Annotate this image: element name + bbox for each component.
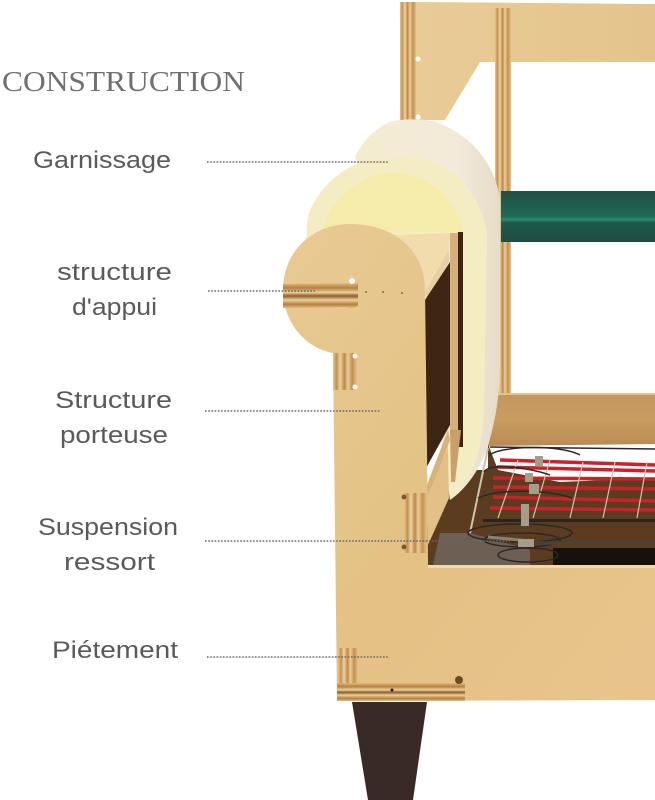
label: structure d'appui: structure (57, 259, 172, 286)
label: Suspension ressort: ressort (64, 549, 155, 576)
label: Suspension ressort (38, 514, 510, 576)
inner wood strip and dark gap (425, 232, 463, 545)
label: Structure porteuse: Structure (55, 387, 172, 414)
foam: outer cushion (355, 119, 500, 500)
foot rail (337, 676, 465, 701)
inner back panel (485, 393, 655, 446)
title: CONSTRUCTION (2, 66, 245, 98)
small tenon (333, 353, 358, 390)
leg (352, 702, 427, 800)
label: Structure porteuse (55, 387, 380, 449)
label: structure d'appui: d'appui (72, 294, 157, 321)
foam: middle layer (306, 157, 487, 500)
label: Piétement: Piétement (52, 637, 178, 664)
label: Garnissage: Garnissage (33, 147, 171, 174)
webbing strap (501, 191, 655, 242)
label: structure d'appui (57, 259, 315, 321)
label: Structure porteuse: porteuse (60, 422, 168, 449)
leg tenon (338, 648, 358, 684)
suspension tenon (402, 493, 427, 553)
label: Suspension ressort: Suspension (38, 514, 178, 541)
back frame (400, 2, 655, 396)
dark cavity (425, 262, 450, 470)
plank edge (425, 250, 449, 300)
armrest tenon (283, 278, 403, 308)
spring suspension (468, 447, 655, 562)
top plank (395, 233, 450, 298)
side panel (283, 224, 655, 701)
seat well (425, 444, 655, 566)
foam: inner layer (322, 173, 464, 232)
